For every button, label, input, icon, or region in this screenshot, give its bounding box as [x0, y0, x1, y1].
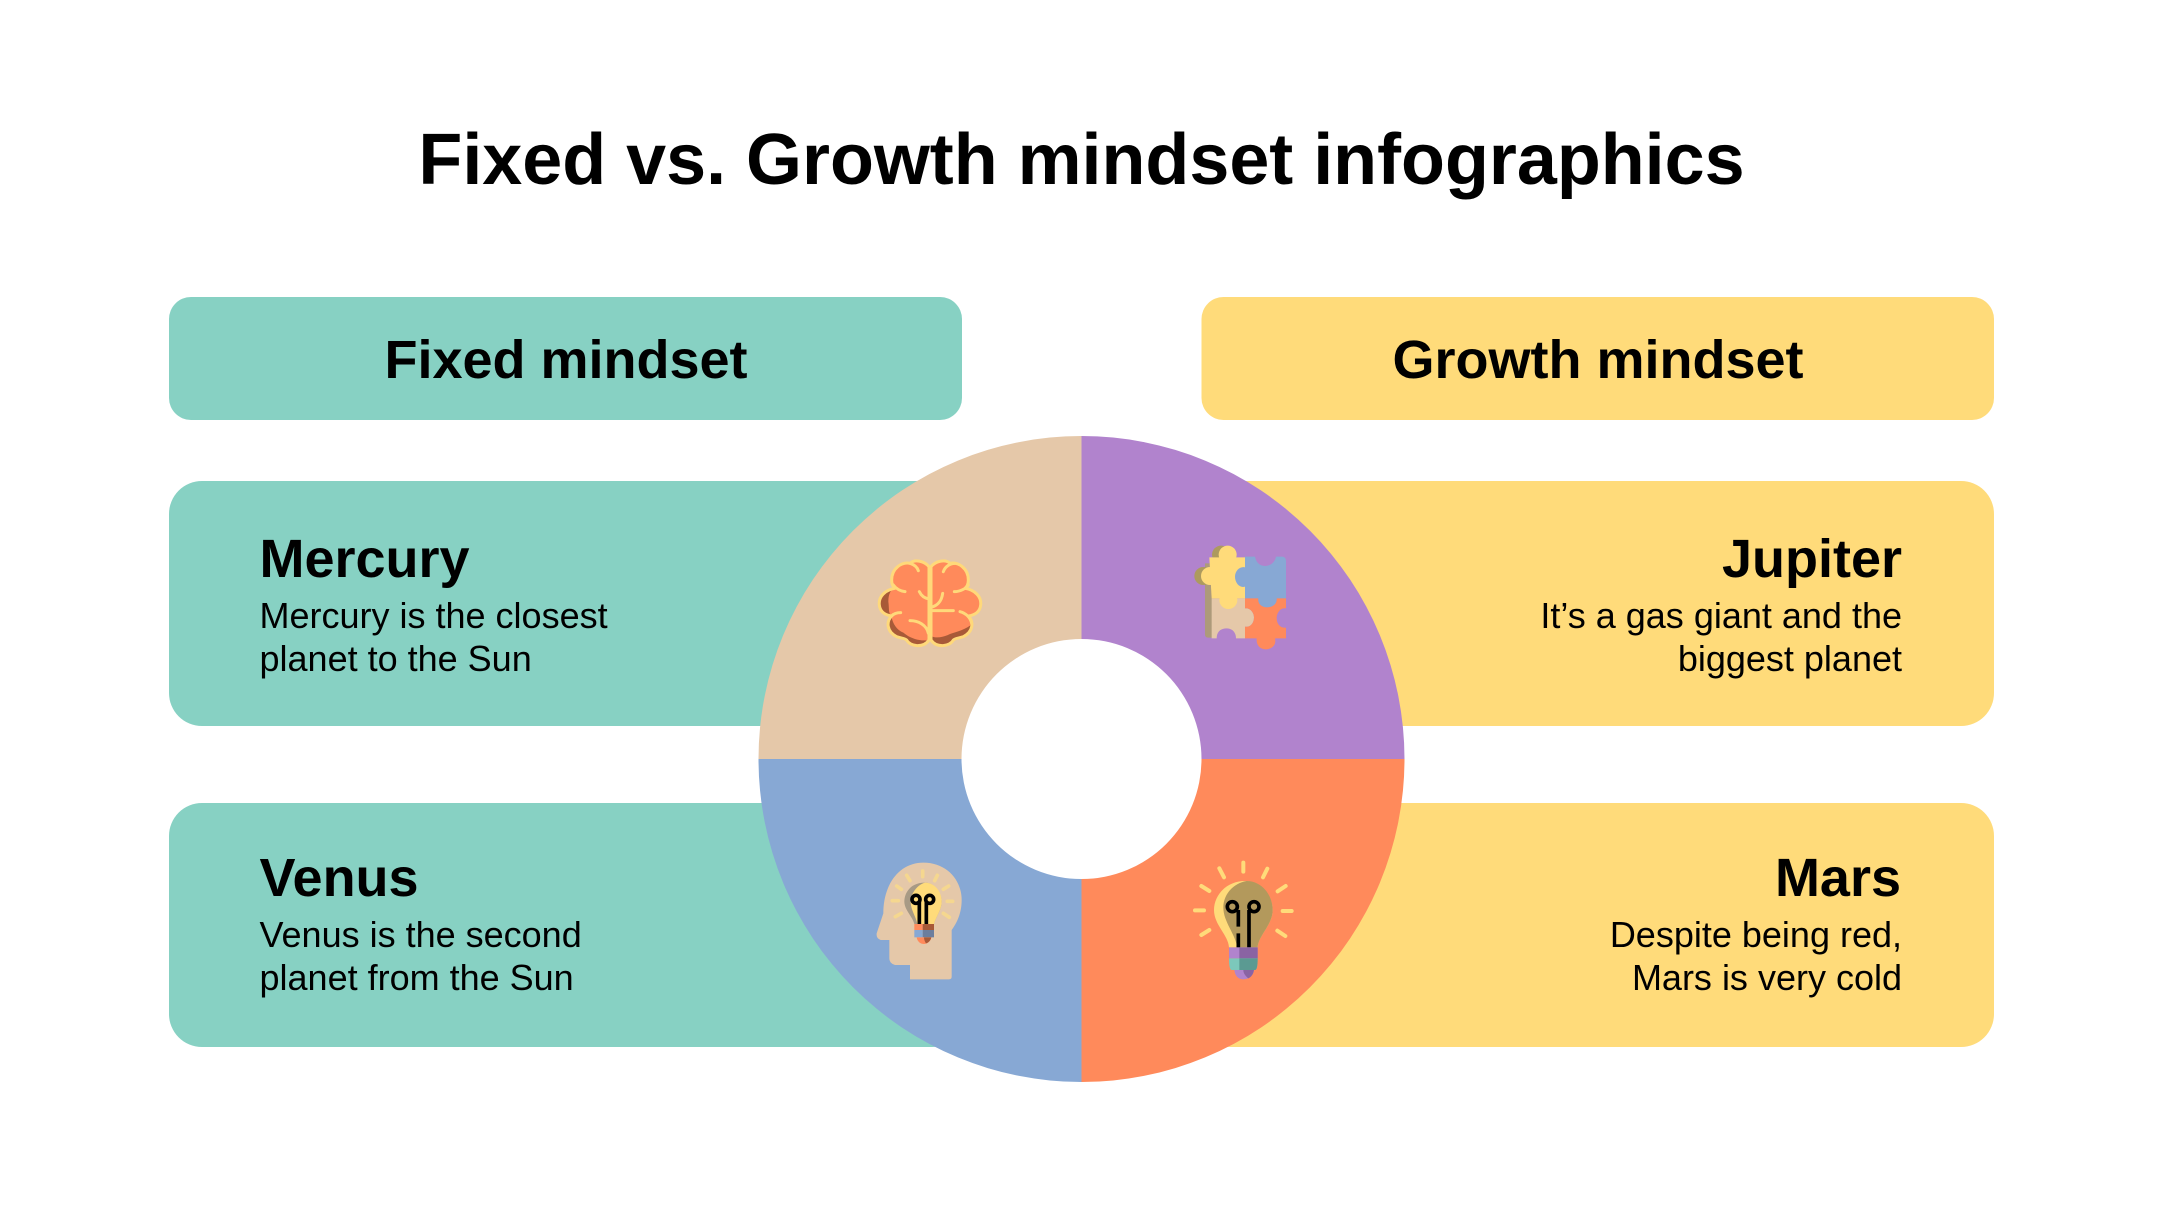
- panel: Jupiter: It’s a gas giant and the: [1540, 595, 1902, 636]
- panel: growth mindset header: [1202, 297, 1994, 420]
- panel: Venus: Venus: [260, 848, 419, 908]
- panel: Jupiter: Jupiter: [1722, 529, 1902, 589]
- panel: Jupiter: biggest planet: [1678, 638, 1902, 679]
- panel: Venus: planet from the Sun: [260, 957, 574, 998]
- panel: Mercury: Mercury: [260, 529, 470, 589]
- panel: Jupiter: [1198, 481, 1994, 726]
- donut chart: [758, 436, 1404, 1082]
- panel: Mars: Despite being red,: [1610, 914, 1902, 955]
- icon: puzzle: [1194, 546, 1286, 649]
- panel: Mars: Mars: [1775, 848, 1901, 908]
- icon: head with light bulb: [877, 863, 962, 979]
- title: Fixed vs. Growth mindset infographics: [418, 120, 1745, 200]
- panel: Venus: Venus is the second: [260, 914, 582, 955]
- panel: Venus: [169, 803, 965, 1047]
- panel: Mars: Mars is very cold: [1632, 957, 1902, 998]
- icon: light bulb: [1195, 863, 1292, 979]
- panel: fixed mindset header: Fixed mindset: [384, 330, 748, 390]
- panel: Mercury: [169, 481, 965, 726]
- panel: Mercury: Mercury is the closest: [260, 595, 608, 636]
- panel: Mars: [1198, 803, 1994, 1047]
- panel: growth mindset header: Growth mindset: [1392, 330, 1804, 390]
- panel: Mercury: planet to the Sun: [260, 638, 532, 679]
- panel: fixed mindset header: [169, 297, 962, 420]
- icon: brain: [879, 561, 981, 646]
